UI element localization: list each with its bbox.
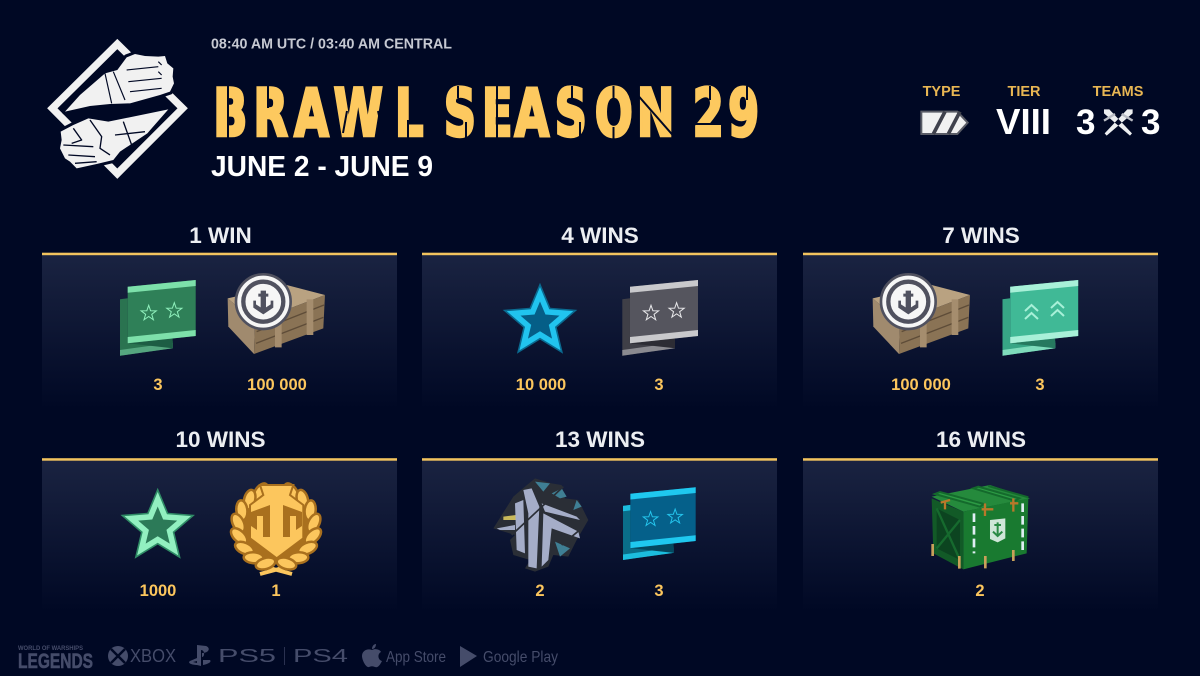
- amount right: 3: [1035, 376, 1045, 394]
- tier label: TIER: [1007, 84, 1041, 100]
- panel: 10 wins: [42, 427, 397, 612]
- icon: green star: [120, 488, 195, 559]
- panel: 13 wins: [422, 427, 777, 612]
- heading: 10 WINS: [175, 427, 266, 452]
- title: BRAWL SEASON 29: [214, 76, 759, 152]
- amount left: 10 000: [516, 376, 566, 394]
- heading: 1 WIN: [189, 223, 252, 248]
- amount left: 2: [535, 582, 545, 600]
- playstation: [189, 645, 348, 666]
- icon: green flags: [120, 280, 196, 356]
- logo: crossed gauntlets in diamond: [52, 44, 183, 174]
- icon: blue flags: [623, 487, 696, 560]
- app store: [362, 644, 446, 667]
- xbox: [108, 646, 176, 666]
- amount right: 1: [271, 582, 281, 600]
- team size left: 3: [1076, 103, 1095, 142]
- playstation: PS5: [218, 646, 276, 666]
- amount: 2: [975, 582, 985, 600]
- amount right: 3: [654, 582, 664, 600]
- heading: 4 WINS: [561, 223, 639, 248]
- icon: crossed swords: [1104, 109, 1133, 136]
- google play: [460, 646, 558, 667]
- team size right: 3: [1141, 103, 1160, 142]
- icon: destroyer class: [921, 112, 968, 134]
- legends logo: LEGENDS: [18, 650, 93, 673]
- panel: 16 wins: [803, 427, 1158, 612]
- panel: 1 win: [42, 223, 397, 410]
- xbox: XBOX: [130, 646, 176, 666]
- app store: App Store: [386, 649, 446, 666]
- panel: 7 wins: [803, 223, 1158, 410]
- amount left: 1000: [140, 582, 176, 600]
- amount left: 3: [153, 376, 163, 394]
- footer: platform logos: [18, 644, 558, 673]
- heading: 16 WINS: [936, 427, 1026, 452]
- legends logo: WORLD OF WARSHIPS: [18, 645, 84, 652]
- amount right: 3: [654, 376, 664, 394]
- icon: green container: [932, 485, 1030, 569]
- panel: 4 wins: [422, 223, 777, 410]
- google play: Google Play: [483, 649, 558, 666]
- icon: camouflage emblem: [493, 478, 588, 572]
- type label: TYPE: [923, 84, 961, 100]
- icon: credits crate: [228, 274, 325, 354]
- legends logo: [18, 645, 93, 673]
- icon: grey flags: [622, 280, 698, 356]
- teams label: TEAMS: [1093, 84, 1144, 100]
- dates: JUNE 2 - JUNE 9: [211, 151, 433, 183]
- icon: credits crate: [873, 274, 970, 354]
- icon: blue star: [503, 283, 577, 354]
- tier value: VIII: [996, 101, 1051, 142]
- amount right: 100 000: [247, 376, 307, 394]
- info: type tier teams: [921, 84, 1160, 142]
- icon: teal flags: [1002, 280, 1078, 356]
- heading: 7 WINS: [942, 223, 1020, 248]
- heading: 13 WINS: [555, 427, 645, 452]
- amount left: 100 000: [891, 376, 951, 394]
- time line: 08:40 AM UTC / 03:40 AM CENTRAL: [211, 36, 452, 52]
- playstation: PS4: [293, 646, 348, 666]
- icon: gold laurel emblem: [228, 481, 324, 574]
